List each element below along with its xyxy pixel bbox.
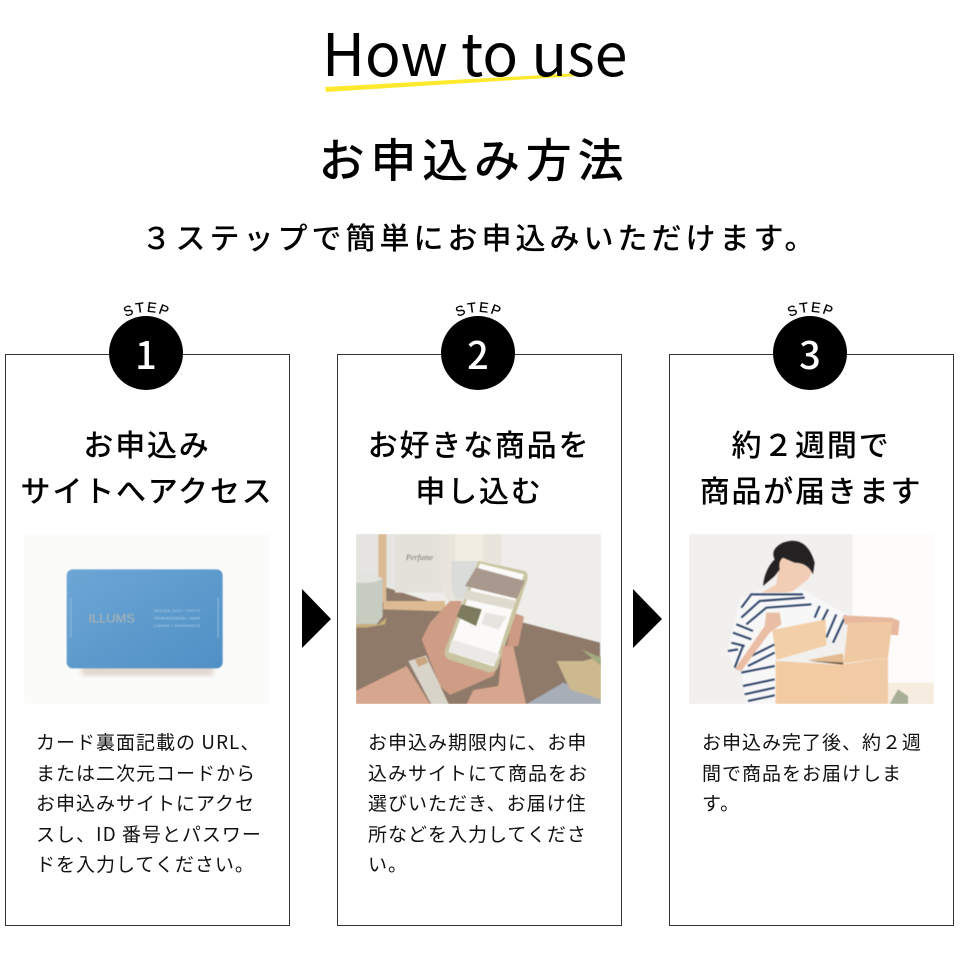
step 2 description: い。 [368, 850, 408, 877]
arrow: step 1 to 2 [302, 589, 331, 648]
panel: step 3 [669, 354, 954, 926]
step 2 image: phone in hand: Perfume [405, 553, 434, 562]
step 3 description: 間で商品をお届けしま [702, 758, 902, 786]
step 2 number circle: 2 [467, 325, 489, 380]
subtitle: ３ステップで簡単にお申込みいただけます。 [142, 214, 818, 258]
step 1 image: blue card [66, 568, 224, 678]
panel: step 1 [5, 354, 290, 926]
step 2 number circle [441, 316, 515, 390]
step 2 label: STEP [456, 302, 501, 316]
step 1 description: お申込みサイトにアクセ [36, 789, 255, 816]
step 3 description: お申込み完了後、約２週 [702, 728, 922, 755]
step 1 heading: お申込み [83, 421, 211, 465]
step 3 heading: 約２週間で [732, 421, 890, 465]
yellow underline [325, 74, 576, 92]
step 3 label: STEP [788, 302, 833, 316]
step 2 description: 込みサイトにて商品をお [368, 758, 588, 786]
step 2 description [368, 728, 588, 877]
step 1 image: blue card: LINNEN / FRAGRANCE [154, 624, 201, 628]
step 3 description [702, 728, 922, 816]
step 1 description: または二次元コードから [36, 758, 256, 786]
step 3 heading: 商品が届きます [700, 467, 922, 511]
step 2 description: 所などを入力してくださ [368, 820, 587, 846]
step 3 number circle: 3 [799, 325, 821, 380]
step 1 label: STEP [124, 302, 169, 316]
step 3 heading [700, 421, 922, 511]
step 3 image: woman opening box [689, 534, 934, 704]
step 2 heading: 申し込む [415, 467, 543, 511]
step 3 description: す。 [702, 789, 740, 816]
panel: step 2 [337, 354, 622, 926]
step 2 image: phone in hand [356, 534, 601, 704]
step 1 image: blue card: ILLUMS [88, 612, 135, 626]
heading: How to use: How to use [322, 8, 627, 93]
step 1 image: blue card: DESIGN 2016 / TOKYO [154, 609, 200, 613]
step 1 description: スし、ID 番号とパスワー [36, 820, 262, 846]
step 1 description: ドを入力してください。 [36, 850, 255, 877]
step 1 number circle [109, 316, 183, 390]
arrow: step 2 to 3 [633, 589, 662, 648]
step 1 description [36, 728, 262, 877]
step 2 heading: お好きな商品を [368, 421, 590, 465]
step 1 heading: サイトへアクセス [21, 467, 273, 511]
title: お申込み方法 [319, 125, 629, 191]
step 1 description: カード裏面記載の URL、 [36, 728, 260, 755]
step 3 number circle [773, 316, 847, 390]
step 2 heading [368, 421, 590, 511]
step 1 number circle: 1 [135, 325, 157, 380]
step 1 heading [21, 421, 273, 511]
step 2 description: お申込み期限内に、お申 [368, 728, 587, 755]
step 2 description: 選びいただき、お届け住 [368, 789, 587, 816]
step 1 image: blue card: FROM BOTANICAL / SHOP [154, 616, 201, 620]
